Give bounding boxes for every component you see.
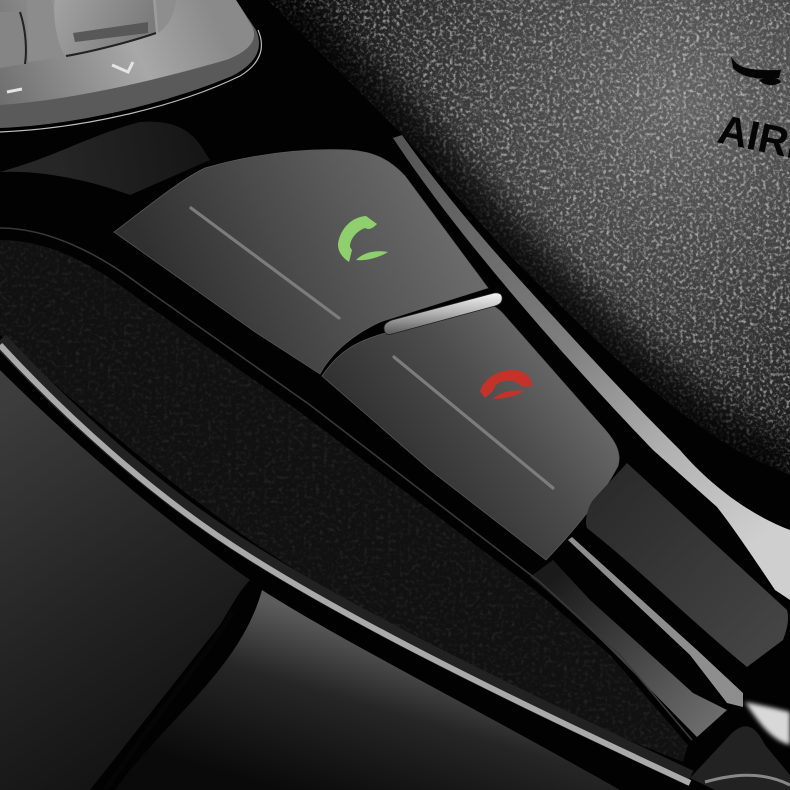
wheel side xyxy=(156,0,176,33)
gloss trim piece xyxy=(530,537,743,737)
button: small side panel xyxy=(586,463,788,667)
icon: green handset xyxy=(338,216,388,262)
panel: top control cluster xyxy=(0,0,261,132)
scroll wheel left xyxy=(0,12,25,68)
icon: red handset xyxy=(480,370,532,399)
panel: leather airbag cover xyxy=(268,0,790,474)
button ridge line xyxy=(191,208,339,318)
button: end call xyxy=(322,306,619,560)
panel: lower left grey door xyxy=(0,370,250,790)
lower right chrome corner xyxy=(690,702,790,790)
dash mark xyxy=(7,89,22,92)
wheel body xyxy=(27,0,64,62)
bright trim strip xyxy=(393,135,790,600)
chrome rim highlight xyxy=(0,340,690,778)
panel: textured leather insert xyxy=(0,230,700,770)
button: answer call xyxy=(114,150,488,374)
button ridge line xyxy=(394,357,553,488)
gloss reflection under cluster xyxy=(0,122,210,195)
airbag icon xyxy=(731,56,781,85)
panel: lower grey surface xyxy=(115,590,620,790)
scroll wheel right xyxy=(54,0,156,56)
chrome divider bar xyxy=(384,293,502,335)
chevron down icon xyxy=(112,62,133,72)
